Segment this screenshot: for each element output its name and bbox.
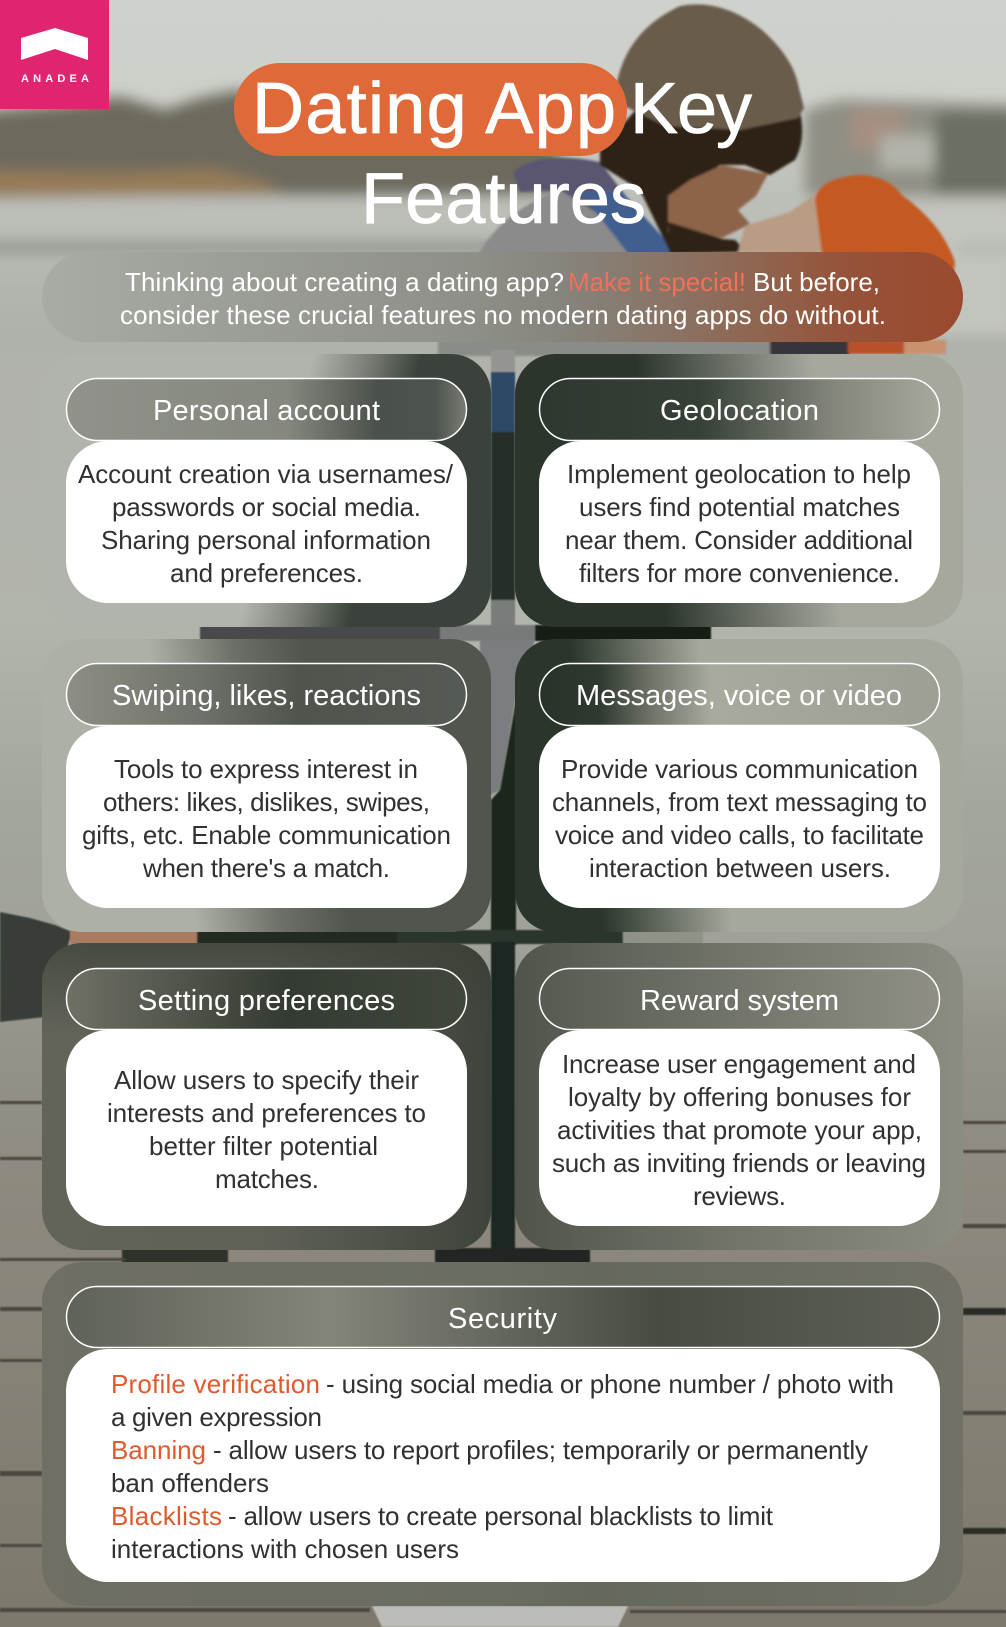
heading pill <box>66 664 466 726</box>
heading pill: Geolocation <box>660 395 819 427</box>
title <box>234 63 752 239</box>
panel: Setting preferences <box>42 943 491 1250</box>
body card: near them. Consider additional <box>565 525 913 555</box>
icon: brown knit hat <box>617 4 804 130</box>
body card: loyalty by offering bonuses for <box>568 1082 911 1112</box>
intro text: Thinking about creating a dating app? <box>125 267 564 297</box>
body card: Banning <box>111 1435 206 1465</box>
heading pill <box>540 378 940 440</box>
body card <box>539 1030 940 1226</box>
body card: Tools to express interest in <box>114 754 418 784</box>
intro banner <box>42 252 963 342</box>
body card: when there's a match. <box>142 853 390 883</box>
panel: Messages, voice or video <box>515 639 963 932</box>
panel: Personal account <box>42 354 491 627</box>
body card <box>539 726 940 908</box>
heading pill: Swiping, likes, reactions <box>112 680 421 712</box>
icon: orange knit hat <box>815 175 955 300</box>
panel: Swiping, likes, reactions <box>42 639 491 932</box>
title text line 2: Features <box>361 159 646 239</box>
body card: - using social media or phone number / photo with <box>326 1369 894 1399</box>
body card: ban offenders <box>111 1468 269 1498</box>
body card: gifts, etc. Enable communication <box>82 820 451 850</box>
logo wordmark: ANADEA <box>21 73 89 85</box>
body card: Increase user engagement and <box>562 1049 916 1079</box>
man's face <box>738 192 826 254</box>
visible figure in the panel gaps <box>0 350 711 1627</box>
body card: others: likes, dislikes, swipes, <box>103 787 430 817</box>
panel: Reward system <box>515 943 963 1250</box>
body card: passwords or social media. <box>112 492 421 522</box>
intro text: Make it special! <box>568 267 746 297</box>
intro text: consider these crucial features no modern dating apps do without. <box>120 300 886 330</box>
body card: channels, from text messaging to <box>552 787 927 817</box>
intro text: But before, <box>753 267 880 297</box>
body card: reviews. <box>693 1181 786 1211</box>
body card: Account creation via usernames/ <box>78 459 454 489</box>
icon: Anadea roof mark <box>21 28 88 60</box>
body card: Allow users to specify their <box>114 1065 419 1095</box>
heading pill <box>66 1286 940 1348</box>
heading pill: Security <box>448 1303 558 1335</box>
hair <box>600 105 802 252</box>
body card: Provide various communication <box>561 754 918 784</box>
body card <box>66 441 467 603</box>
body card: activities that promote your app, <box>557 1115 922 1145</box>
body card: - allow users to report profiles; temporarily or permanently <box>213 1435 868 1465</box>
heading pill <box>540 664 940 726</box>
coat and hands below the banner <box>438 340 770 356</box>
body card: filters for more convenience. <box>579 558 900 588</box>
body card: Blacklists <box>111 1501 222 1531</box>
body card: - allow users to create personal blacklists to limit <box>228 1501 774 1531</box>
coat <box>478 190 680 256</box>
body card: Profile verification <box>111 1369 320 1399</box>
heading pill <box>66 968 466 1030</box>
body card: voice and video calls, to facilitate <box>555 820 924 850</box>
panel: Security <box>42 1262 963 1606</box>
body card: Implement geolocation to help <box>567 459 911 489</box>
intro text <box>120 267 886 330</box>
heading pill <box>540 968 940 1030</box>
dock planks <box>0 1101 1006 1613</box>
body card: interests and preferences to <box>107 1098 426 1128</box>
heading pill: Reward system <box>640 985 839 1017</box>
body card: matches. <box>215 1164 319 1194</box>
title text line 1: Dating App <box>252 69 616 149</box>
body card <box>66 1030 467 1226</box>
heading pill <box>66 378 466 440</box>
panel: Geolocation <box>515 354 963 627</box>
heading pill: Messages, voice or video <box>576 680 902 712</box>
title text line 1: Key <box>630 69 752 149</box>
body card: interaction between users. <box>589 853 891 883</box>
body card: such as inviting friends or leaving <box>552 1148 926 1178</box>
body card: better filter potential <box>149 1131 378 1161</box>
heading pill: Personal account <box>153 395 380 427</box>
woman's face <box>668 165 768 238</box>
body card: and preferences. <box>170 558 363 588</box>
body card: a given expression <box>111 1402 322 1432</box>
heading pill: Setting preferences <box>138 985 395 1017</box>
body card <box>66 726 467 908</box>
body card: interactions with chosen users <box>111 1534 459 1564</box>
body card: users find potential matches <box>579 492 900 522</box>
scarf <box>513 158 678 256</box>
body card: Sharing personal information <box>101 525 431 555</box>
logo badge <box>0 0 109 109</box>
title highlight pill <box>234 63 627 156</box>
body card <box>539 441 940 603</box>
body card <box>66 1349 940 1582</box>
